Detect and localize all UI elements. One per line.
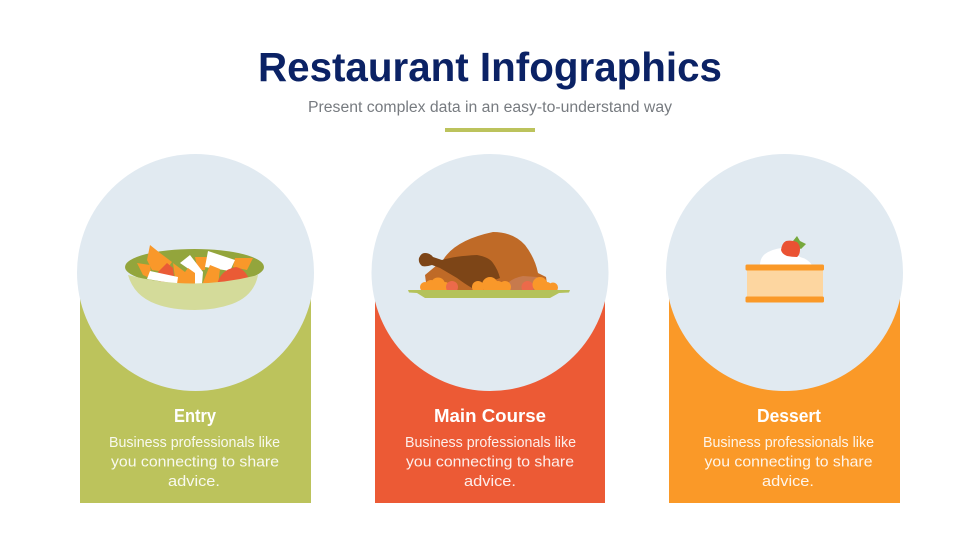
title: Restaurant Infographics: [258, 44, 722, 90]
main course description: [405, 435, 576, 490]
dessert description: [703, 435, 874, 490]
dessert circle: [666, 154, 903, 391]
dessert heading: Dessert: [757, 405, 821, 426]
main course card: [375, 290, 605, 503]
panel: entry: [77, 154, 314, 503]
main course description: advice.: [464, 474, 516, 490]
entry card: [80, 290, 311, 503]
accent rule: [445, 128, 535, 132]
entry description: [109, 435, 280, 490]
main course description: Business professionals like: [405, 435, 576, 451]
entry heading: Entry: [174, 405, 217, 426]
dessert description: you connecting to share: [704, 454, 872, 470]
entry circle: [77, 154, 314, 391]
main course circle: [372, 154, 608, 391]
entry description: advice.: [168, 474, 220, 490]
subtitle: Present complex data in an easy-to-understand way: [308, 99, 672, 116]
entry description: you connecting to share: [111, 454, 279, 470]
icon: roast turkey: [408, 232, 570, 298]
panel: main course: [372, 154, 608, 503]
icon: salad bowl: [125, 245, 264, 310]
garnish: [420, 277, 558, 293]
dessert description: Business professionals like: [703, 435, 874, 451]
main course description: you connecting to share: [406, 454, 574, 470]
panel: dessert: [666, 154, 903, 503]
icon: cake slice: [746, 236, 824, 302]
entry description: Business professionals like: [109, 435, 280, 451]
main course heading: Main Course: [434, 405, 546, 426]
dessert description: advice.: [762, 474, 814, 490]
dessert card: [669, 290, 900, 503]
